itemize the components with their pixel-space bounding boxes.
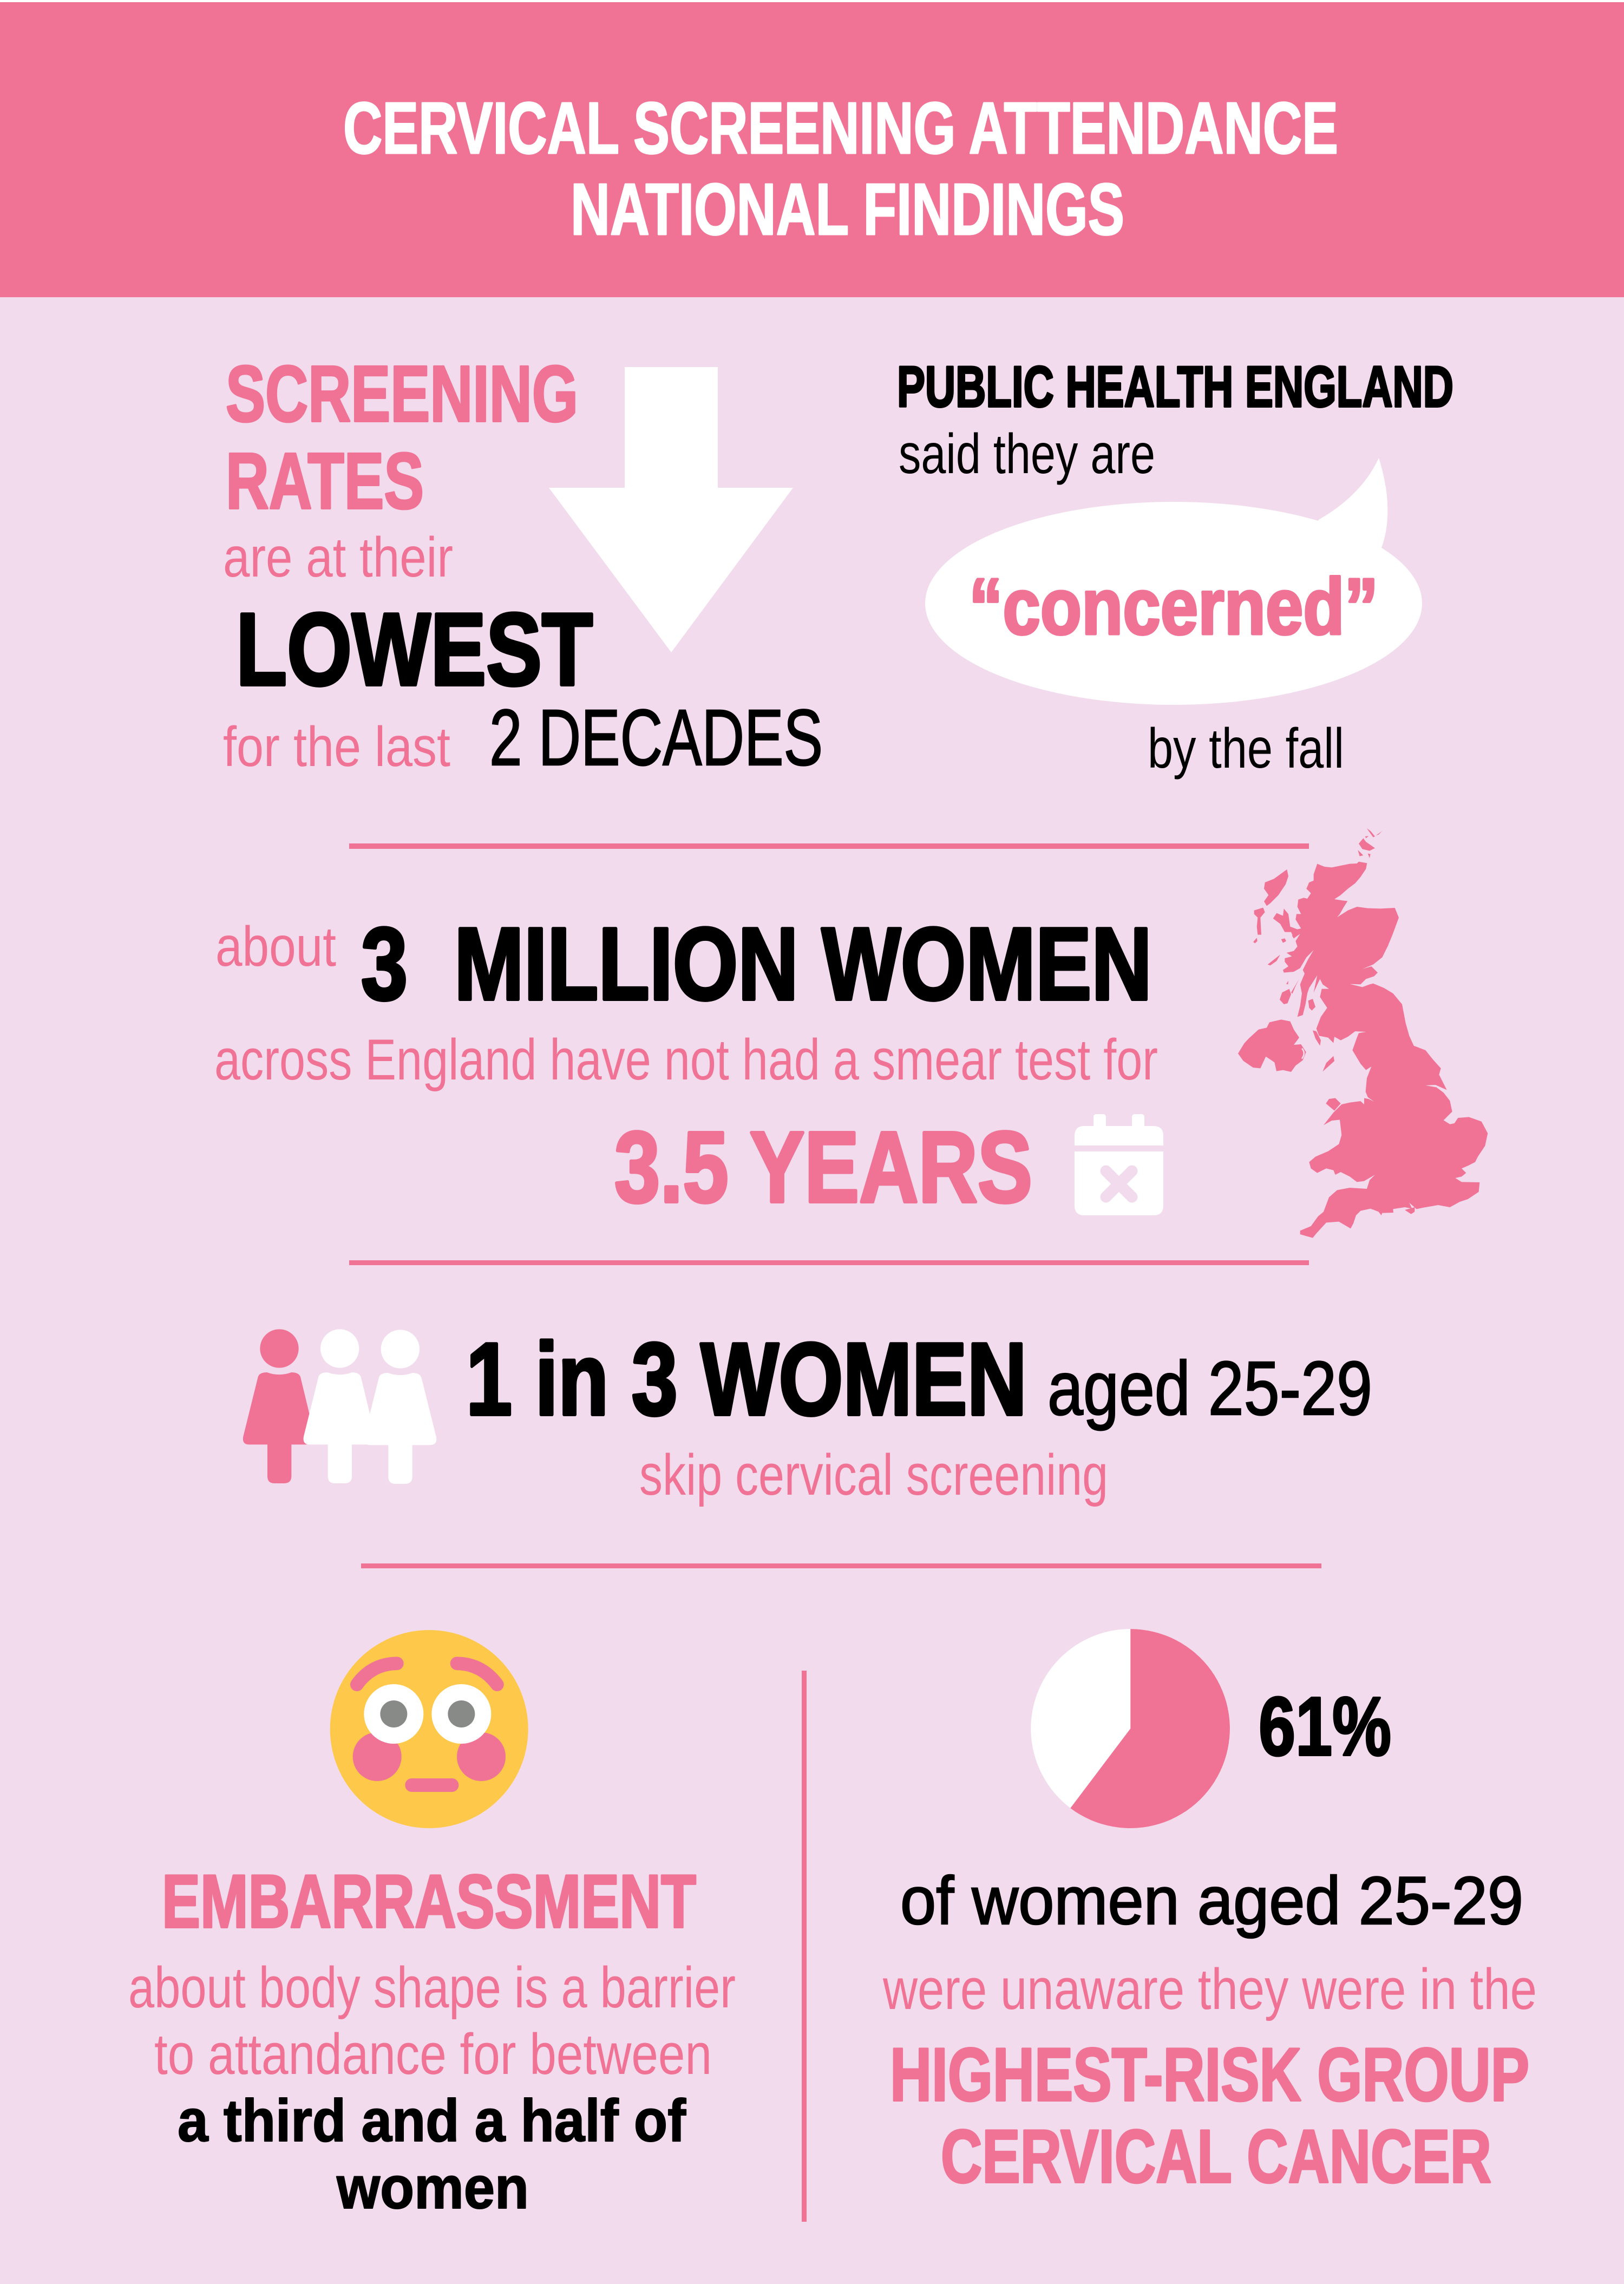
text: about body shape: about body shape is a barrier <box>128 1955 736 2020</box>
title line 2: NATIONAL FINDINGS <box>571 168 1124 250</box>
icon: down arrow <box>549 367 793 652</box>
header banner <box>0 2 1624 297</box>
text: 3 million women: 3 MILLION WOMEN <box>361 907 1152 1022</box>
panel: screening rates <box>223 350 823 782</box>
text: skip cervical screening: skip cervical screening <box>639 1442 1108 1507</box>
text: 3.5 years: 3.5 YEARS <box>614 1111 1032 1223</box>
panel: 1 in 3 women <box>243 1322 1372 1507</box>
text: of women aged 25-29: of women aged 25-29 <box>900 1863 1523 1939</box>
text: aged 25-29: aged 25-29 <box>1047 1345 1372 1431</box>
text: women: women <box>336 2155 529 2221</box>
panel: 61 percent <box>882 1629 1537 2198</box>
chart: pie 61 percent <box>1031 1629 1230 1828</box>
text: are at their: are at their <box>223 526 453 589</box>
heading: screening: SCREENING <box>226 350 578 439</box>
text: attendance: to attandance for between <box>154 2021 712 2086</box>
panel: embarrassment <box>128 1630 736 2221</box>
text: across england: across England have not had a smear test for <box>214 1027 1158 1092</box>
icon: calendar with cross <box>1075 1114 1163 1215</box>
panel: 3 million women <box>214 907 1163 1223</box>
icon: three women <box>243 1329 436 1484</box>
speech bubble <box>925 458 1422 705</box>
text: about: about <box>215 915 336 978</box>
text: said they are: said they are <box>899 423 1155 486</box>
text: by the fall: by the fall <box>1148 717 1344 780</box>
text: concerned: “concerned” <box>969 562 1378 651</box>
text: 1 in 3 women: 1 in 3 WOMEN <box>466 1322 1027 1437</box>
text: 61%: 61% <box>1259 1680 1391 1773</box>
heading: rates: RATES <box>226 437 424 526</box>
text: lowest: LOWEST <box>236 592 593 707</box>
text: a third and a half of: a third and a half of <box>178 2087 686 2154</box>
text: for the last: for the last <box>223 716 450 778</box>
icon: flushed face <box>330 1630 528 1828</box>
text: 2 decades: 2 DECADES <box>489 693 823 782</box>
panel: public health england <box>897 354 1453 780</box>
map: united kingdom <box>1238 828 1488 1238</box>
heading: embarrassment: EMBARRASSMENT <box>162 1860 696 1943</box>
